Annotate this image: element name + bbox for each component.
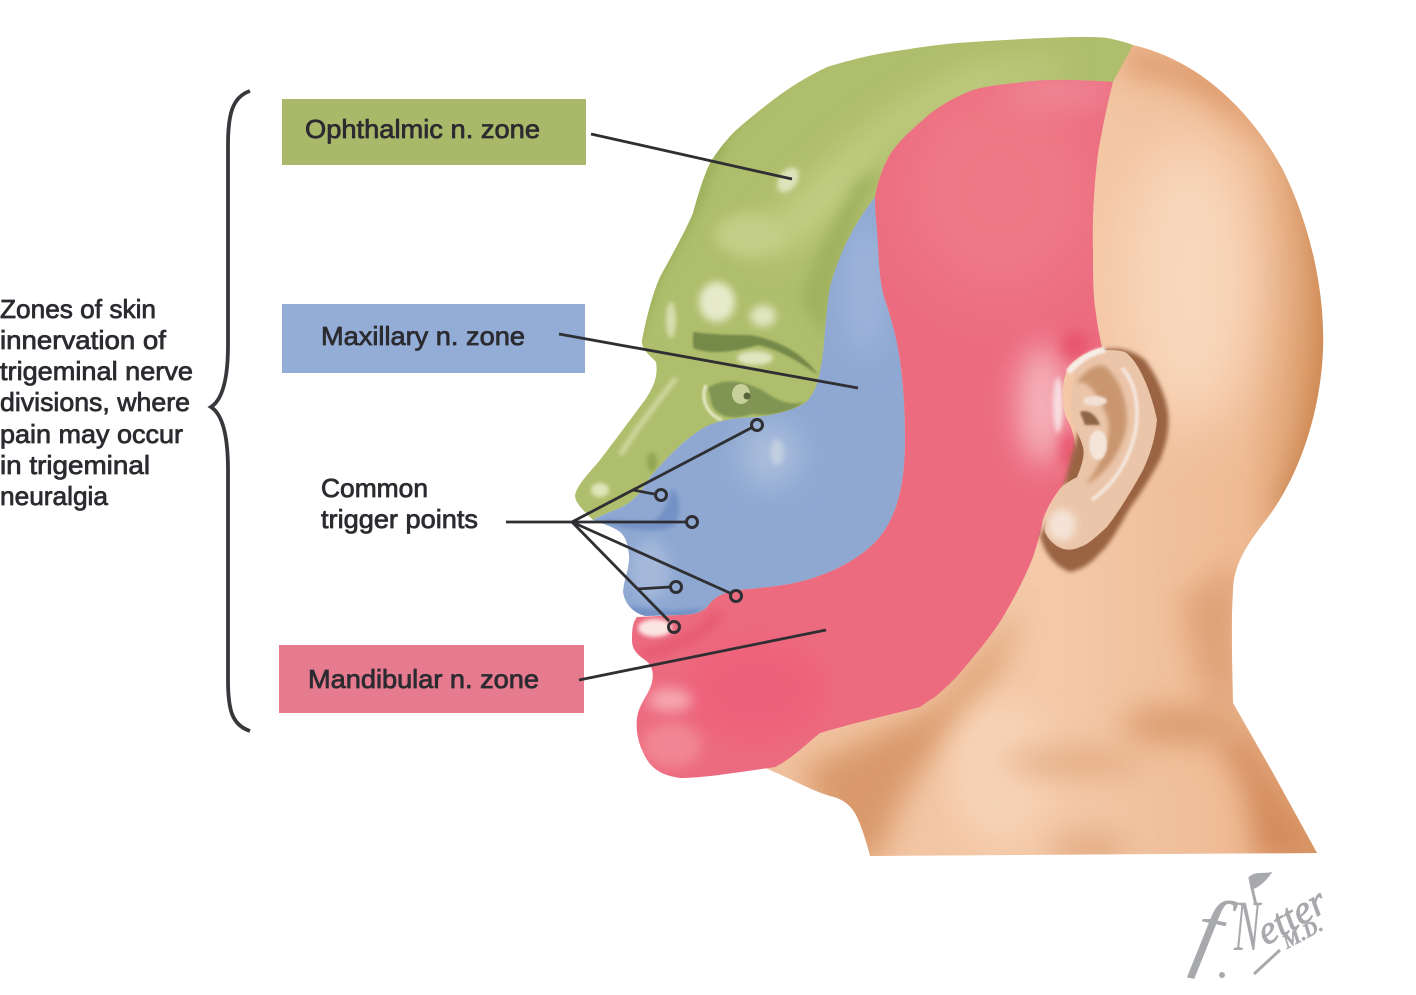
description text: Zones of skin [0,294,156,324]
label: maxillary zone: Maxillary n. zone [321,321,525,351]
zone: ophthalmic (green) [575,37,1133,520]
label: common trigger points: trigger points [321,504,478,534]
signature: f [1186,878,1243,985]
signature: M.D. [1278,914,1327,954]
zone: mandibular (red) [620,70,1130,790]
label: ophthalmic zone: Ophthalmic n. zone [305,114,540,144]
label: mandibular zone [279,645,584,713]
label: common trigger points [321,473,478,534]
zone leader lines [559,134,858,680]
description text: divisions, where [0,387,190,417]
description text [0,294,193,511]
description text: in trigeminal [0,450,150,480]
label: mandibular zone: Mandibular n. zone [308,664,539,694]
label: ophthalmic zone [282,99,586,165]
label: common trigger points: Common [321,473,428,503]
skin: head and neck [700,30,1345,870]
illustration: head in profile with nerve zones [560,30,1345,870]
trigger point leaders [506,428,751,621]
forehead highlights [699,282,735,322]
signature: etter [1248,878,1334,954]
signature [1186,874,1334,985]
ear [1040,348,1169,572]
nose highlight [620,378,676,455]
description text: pain may occur [0,419,183,449]
eyebrow [693,332,818,375]
brace [211,91,250,731]
label: maxillary zone [282,304,585,373]
description text: trigeminal nerve [0,356,193,386]
zone: maxillary (blue) [593,197,905,616]
leader lines and trigger point markers [506,134,858,680]
description text: neuralgia [0,481,109,511]
trigger point circles [656,420,762,632]
eye [708,381,804,417]
description text: innervation of [0,325,167,355]
signature: N [1233,886,1263,966]
